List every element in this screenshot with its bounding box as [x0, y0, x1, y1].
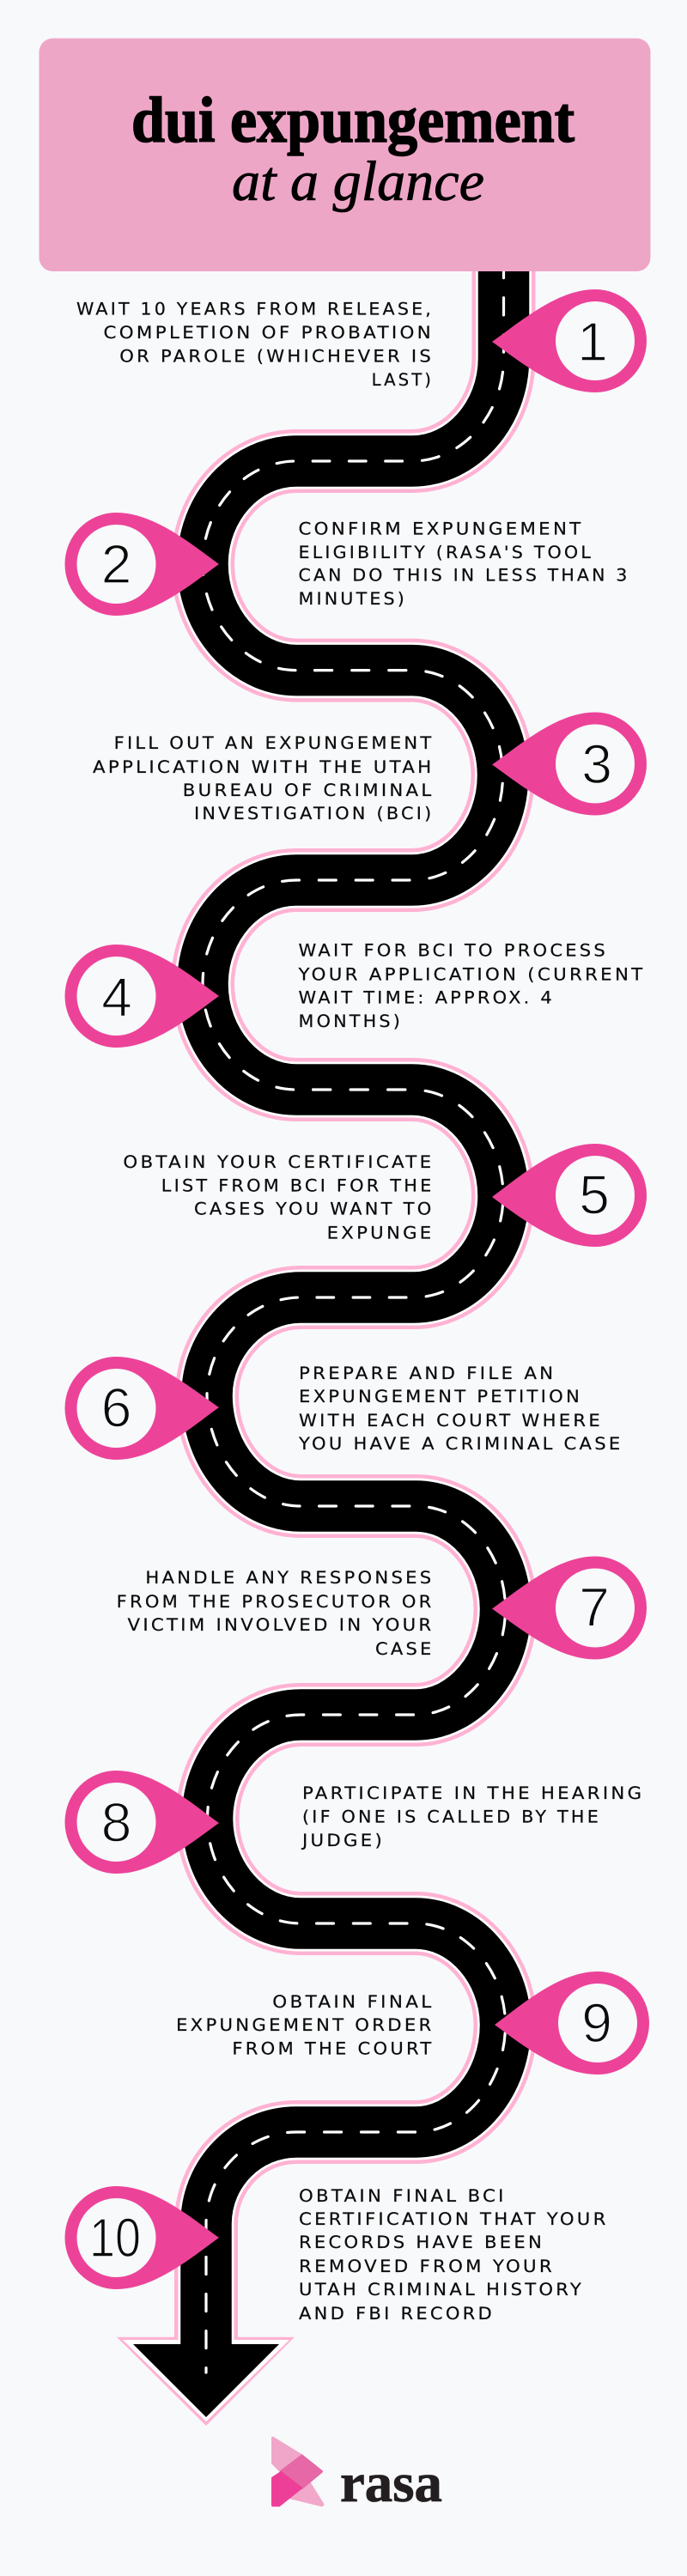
step 8 text: (IF ONE IS CALLED BY THE [302, 1807, 601, 1827]
step 10 text: CERTIFICATION THAT YOUR [299, 2209, 609, 2229]
winding road with arrow [117, 258, 505, 2426]
step 10 text: REMOVED FROM YOUR [299, 2257, 555, 2276]
step 10 text: OBTAIN FINAL BCI [299, 2186, 507, 2206]
step 8 text: JUDGE) [301, 1831, 385, 1850]
step 5 pin: 5 [579, 1164, 610, 1226]
step 10 pin [65, 2186, 219, 2289]
step 1 pin: 1 [577, 311, 608, 373]
step 2 pin [65, 513, 219, 616]
step 8 text: PARTICIPATE IN THE HEARING [302, 1783, 644, 1803]
step 6 pin: 6 [101, 1377, 131, 1439]
step 1 pin [492, 289, 647, 392]
step 5 text [123, 1152, 435, 1243]
step 5 text: CASES YOU WANT TO [194, 1200, 435, 1219]
step 8 text [301, 1783, 644, 1850]
step 10 text: UTAH CRIMINAL HISTORY [299, 2280, 584, 2300]
step 3 text: APPLICATION WITH THE UTAH [93, 757, 435, 777]
step 10 text: RECORDS HAVE BEEN [299, 2233, 544, 2252]
step 6 text: EXPUNGEMENT PETITION [299, 1387, 582, 1406]
step 7 text: HANDLE ANY RESPONSES [145, 1568, 434, 1588]
step 9 text [176, 1992, 435, 2059]
step 2 text: MINUTES) [299, 589, 407, 609]
icon: rasa mark [273, 2438, 323, 2506]
step 7 pin [492, 1556, 647, 1659]
step 9 pin [495, 1971, 649, 2075]
step 1 text: LAST) [372, 370, 434, 390]
step 7 text: VICTIM INVOLVED IN YOUR [127, 1615, 435, 1635]
step 6 text: YOU HAVE A CRIMINAL CASE [298, 1434, 623, 1454]
step 2 text: ELIGIBILITY (RASA'S TOOL [299, 543, 593, 562]
step 1 text [76, 300, 434, 390]
title banner [40, 39, 651, 271]
step 3 text: BUREAU OF CRIMINAL [183, 781, 435, 800]
step 2 text [299, 519, 630, 609]
step 9 text: OBTAIN FINAL [272, 1992, 435, 2012]
step 6 text: WITH EACH COURT WHERE [299, 1411, 603, 1431]
title: dui expungement: dui expungement [131, 85, 575, 156]
step 2 pin: 2 [101, 533, 131, 595]
step 9 pin: 9 [581, 1992, 612, 2054]
wordmark: rasa: rasa [340, 2452, 442, 2514]
step 6 pin [65, 1357, 219, 1460]
rasa logo [273, 2438, 442, 2514]
step 3 text: INVESTIGATION (BCI) [194, 804, 435, 823]
step 6 text [298, 1364, 623, 1454]
step 5 text: OBTAIN YOUR CERTIFICATE [123, 1152, 434, 1172]
step 7 pin: 7 [579, 1577, 610, 1638]
step 10 text: AND FBI RECORD [299, 2304, 495, 2324]
step 1 text: WAIT 10 YEARS FROM RELEASE, [76, 300, 434, 319]
step 3 text: FILL OUT AN EXPUNGEMENT [114, 733, 435, 753]
step 10 text [299, 2186, 609, 2324]
step 9 text: EXPUNGEMENT ORDER [176, 2015, 435, 2035]
step 3 pin [492, 713, 647, 816]
step 4 text [297, 941, 646, 1031]
step 4 text: YOUR APPLICATION (CURRENT [297, 965, 646, 985]
step 1 text: COMPLETION OF PROBATION [103, 323, 434, 343]
step 4 text: MONTHS) [299, 1012, 403, 1031]
step 2 text: CAN DO THIS IN LESS THAN 3 [299, 566, 630, 586]
step 5 pin [492, 1144, 647, 1247]
step 5 text: LIST FROM BCI FOR THE [161, 1176, 435, 1196]
step 4 pin [65, 945, 219, 1048]
step 10 pin: 10 [89, 2207, 141, 2269]
step 7 text: FROM THE PROSECUTOR OR [117, 1592, 434, 1612]
step 3 text [93, 733, 435, 823]
step 4 pin: 4 [101, 967, 132, 1029]
step 6 text: PREPARE AND FILE AN [299, 1364, 556, 1383]
subtitle: at a glance: at a glance [232, 150, 484, 213]
step 3 pin: 3 [581, 733, 612, 795]
step 5 text: EXPUNGE [327, 1224, 435, 1243]
step 1 text: OR PAROLE (WHICHEVER IS [119, 347, 434, 367]
step 7 text [117, 1568, 434, 1659]
step 8 pin [65, 1771, 219, 1874]
step 4 text: WAIT TIME: APPROX. 4 [299, 988, 555, 1008]
step 2 text: CONFIRM EXPUNGEMENT [299, 519, 584, 539]
step 4 text: WAIT FOR BCI TO PROCESS [299, 941, 608, 961]
step 7 text: CASE [375, 1639, 435, 1659]
step 8 pin: 8 [101, 1791, 131, 1853]
step 9 text: FROM THE COURT [232, 2039, 435, 2059]
